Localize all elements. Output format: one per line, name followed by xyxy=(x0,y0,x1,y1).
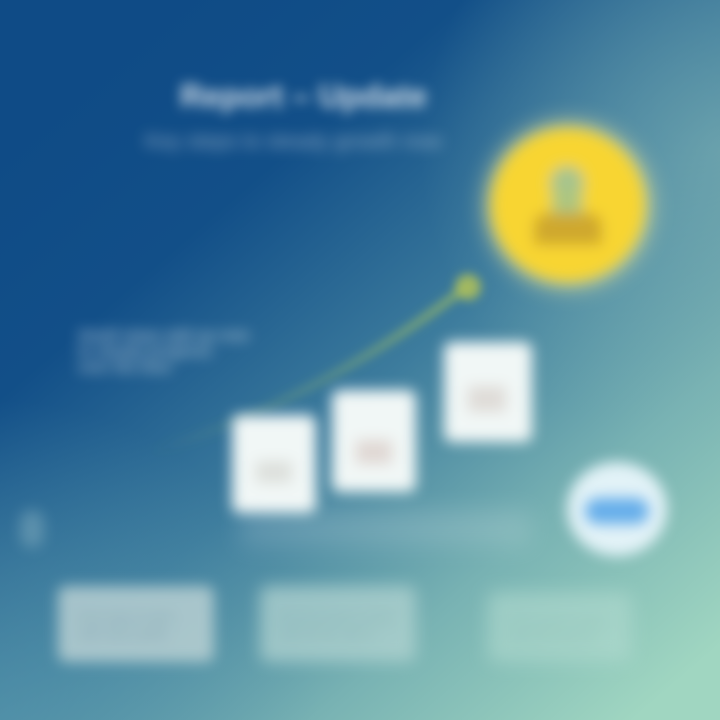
card 1 xyxy=(232,415,316,513)
left text block: to steady progress xyxy=(78,343,212,360)
card 2 xyxy=(332,390,416,492)
text: bottom middle: with more reach xyxy=(280,626,372,641)
title: Report – Update xyxy=(180,78,427,114)
card 1 mark xyxy=(256,461,292,483)
left text block: Small steps add up now xyxy=(78,327,249,344)
icon: gold circle with person xyxy=(470,107,665,302)
icon: small left marker xyxy=(20,510,44,548)
text: bottom middle: Second step in plan xyxy=(280,610,394,625)
card reflections xyxy=(240,510,530,546)
text: bottom right: with best result xyxy=(506,630,593,645)
subtitle: Key steps to steady growth now xyxy=(145,130,442,153)
icon: blue badge xyxy=(567,462,667,556)
left text block xyxy=(72,323,253,380)
panel: bottom left xyxy=(58,586,214,662)
panel: bottom middle xyxy=(260,586,416,662)
text: bottom left xyxy=(78,610,198,644)
panel: bottom right xyxy=(488,592,632,662)
card 3 mark xyxy=(468,386,506,412)
card 3 xyxy=(444,342,532,442)
text: bottom left: with clear goals xyxy=(78,626,168,641)
text: bottom middle xyxy=(280,610,400,644)
text: bottom left: First step in plan xyxy=(78,610,173,625)
badge center xyxy=(585,498,649,524)
text: bottom right xyxy=(506,614,616,648)
left text block: over the time xyxy=(78,359,171,376)
card 2 mark xyxy=(356,440,392,464)
circle glow xyxy=(482,119,654,291)
text: bottom right: Third step in plan xyxy=(506,614,606,629)
